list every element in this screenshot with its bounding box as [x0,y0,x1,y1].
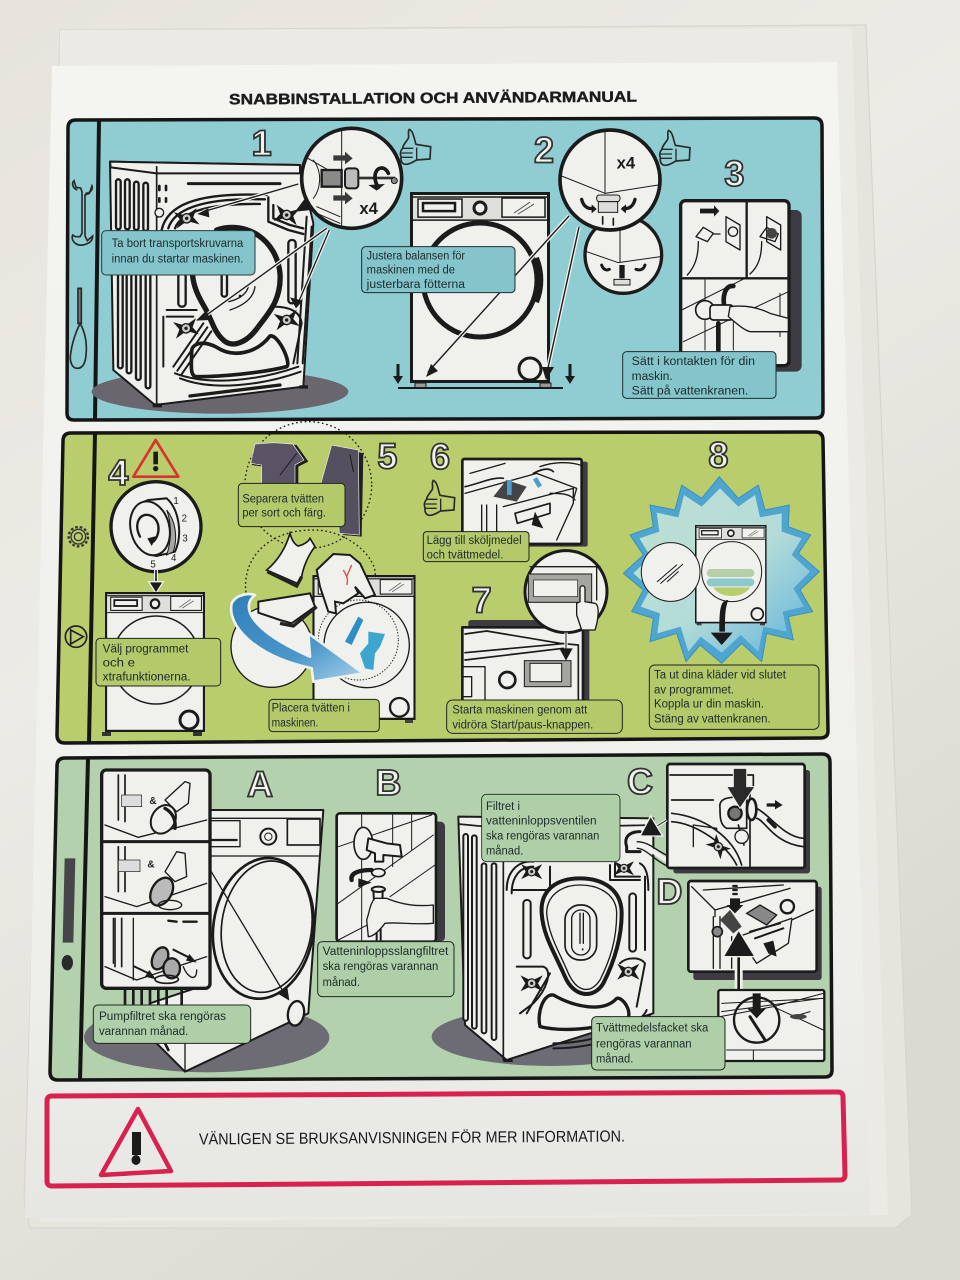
arrow to dial knob [149,570,163,593]
callout: adjust feet: justerbara fötterna [366,277,465,291]
callout: inlet valve filter: Filtret i [486,799,520,813]
shadow under washer C/D [432,1007,668,1066]
callout: add detergent: och tvättmedel. [427,547,503,561]
zoom circle: start button [525,551,607,633]
callout: choose program: xtrafunktionerna. [103,670,191,684]
zoom circle: transport bolt [302,128,402,228]
clothes in a pile [258,533,375,626]
washer 2 front view [393,194,575,388]
icon: wrench [72,181,93,245]
zoom circle: foot raised: x4 [617,153,636,172]
step D lower detail [718,990,824,1061]
callout: plug in and tap on: maskin. [632,369,673,383]
arrows to washer feet [426,216,579,380]
paper sheet [25,62,870,1218]
shadow under washer 1 [92,370,348,414]
callout: detergent compartment: månad. [596,1052,633,1066]
step D illustration: detergent drawer [688,881,822,980]
callout: sort laundry [238,483,345,527]
callout: pump filter [93,1005,251,1043]
callout: choose program: och e [103,656,135,670]
blue tie and socks [345,617,385,670]
callout: detergent compartment: Tvättmedelsfacket ska [596,1021,708,1035]
callout: inlet valve filter [482,794,620,862]
washer 8 [641,526,767,625]
arrow to start button [559,633,573,661]
callout: transport bolts [102,231,255,275]
zoom circle: foot lowered [585,217,662,293]
callout: take out clothes [649,665,819,729]
step A detail strip [102,770,210,988]
arrow: take out clothes [711,600,733,645]
washer 1 rear view [110,162,313,407]
number 2: 2 [534,130,554,171]
warning triangle [133,440,178,477]
callout: inlet valve filter: vatteninloppsventilen [486,813,597,827]
callout: take out clothes: Ta ut dina kläder vid slutet [654,667,787,681]
number 6: 6 [430,436,450,477]
callout: inlet valve filter: ska rengöras varannan [486,828,599,842]
letter D: D [656,871,682,912]
warning box [47,1092,845,1186]
washer 5 with laundry bubbles [231,576,415,723]
number 1: 1 [252,123,272,164]
step B illustration: inlet hose filter [337,813,445,942]
callout: load laundry [269,699,379,732]
icon: screwdriver [70,288,86,368]
washer C/D rear view [458,817,670,1062]
arrows to transport bolts [196,184,329,321]
callout: take out clothes: av programmet. [654,682,734,696]
warning text: VÄNLIGEN SE BRUKSANVISNINGEN FÖR MER INFORMATION. [199,1127,625,1148]
panel: maintenance steps A-D [50,754,832,1080]
arrow from C detail to valve [640,816,667,836]
number 4: 4 [108,452,128,493]
callout: choose program: Välj programmet [103,641,189,655]
icon: exclamation bar [62,858,75,970]
step 6 illustration: detergent drawer [462,459,588,547]
callout: plug in and tap on: Sätt på vattenkranen. [632,383,748,397]
callout: inlet hose filter: Vatteninloppsslangfiltret [323,944,449,958]
callout: adjust feet [362,247,515,293]
callout: choose program [96,638,221,686]
panel: installation steps 1-3 [67,118,823,420]
program dial [111,482,201,572]
step C illustration: inlet valve filter [667,764,810,873]
callout: sort laundry: per sort och färg. [242,506,326,520]
step A detail strip: & [149,796,157,807]
callout: adjust feet: maskinen med de [367,263,455,277]
program dial: 1 [173,496,179,507]
program dial: 3 [182,534,188,545]
callout: transport bolts: innan du startar maskinen. [112,252,243,266]
number 5: 5 [377,435,397,476]
step 7 illustration: start button [462,620,589,702]
callout: inlet hose filter: ska rengöras varannan [323,959,438,973]
zoom circle: foot raised [560,130,660,230]
callout: transport bolts: Ta bort transportskruvarna [112,236,243,250]
callout: detergent compartment [592,1017,725,1070]
icon: thumbs up 6 [424,480,455,515]
callout: inlet hose filter [318,942,454,997]
icon: gear [69,527,88,546]
washer 4 [102,593,204,736]
washer A side view [125,810,323,1072]
callout: plug in and tap on [623,352,776,398]
shadow under washer A [84,1002,329,1072]
callout: inlet valve filter: månad. [486,843,523,857]
big blue arrow [231,594,363,682]
callout: start machine: vidröra Start/paus-knappen. [452,717,593,731]
callout: pump filter: varannan månad. [99,1024,188,1038]
zoom circle: transport bolt: x4 [359,199,379,218]
callout: plug in and tap on: Sätt i kontakten för din [632,354,755,368]
callout: detergent compartment: rengöras varannan [596,1036,692,1050]
callout: inlet hose filter: månad. [323,975,360,989]
dark shirt and jeans [251,443,363,537]
starburst [623,477,819,663]
callout: add detergent [423,532,529,562]
callout: sort laundry: Separera tvätten [242,491,324,505]
letter B: B [375,762,401,803]
callout: add detergent: Lägg till sköljmedel [427,533,522,547]
callout: take out clothes: Koppla ur din maskin. [654,697,764,711]
callout: adjust feet: Justera balansen för [367,248,465,262]
dashed circles: sort groups [245,422,375,597]
step A detail strip: & [147,859,155,870]
step 3 illustration: plug and tap [681,201,802,372]
arrow between D details [723,930,755,990]
callout: start machine: Starta maskinen genom att [452,702,588,716]
callout: load laundry: maskinen. [272,716,318,730]
number 7: 7 [472,580,492,621]
letter C: C [627,761,653,802]
callout: load laundry: Placera tvätten i [272,701,350,715]
program dial: 5 [150,559,156,570]
callout: take out clothes: Stäng av vattenkranen. [654,711,771,725]
icon: thumbs up 2 [660,130,690,165]
icon: play button [65,626,87,647]
callout: start machine [447,700,622,733]
number 8: 8 [708,434,728,475]
arrow to pump filter [211,871,289,1001]
warning triangle icon [101,1109,171,1175]
title: SNABBINSTALLATION OCH ANVÄNDARMANUAL [229,89,637,108]
callout: pump filter: Pumpfiltret ska rengöras [99,1009,226,1023]
panel: usage steps 4-8 [57,422,828,743]
program dial: 4 [171,553,177,564]
number 3: 3 [724,153,744,194]
letter A: A [247,764,273,805]
icon: thumbs up 1 [400,129,431,164]
program dial: 2 [182,514,187,525]
